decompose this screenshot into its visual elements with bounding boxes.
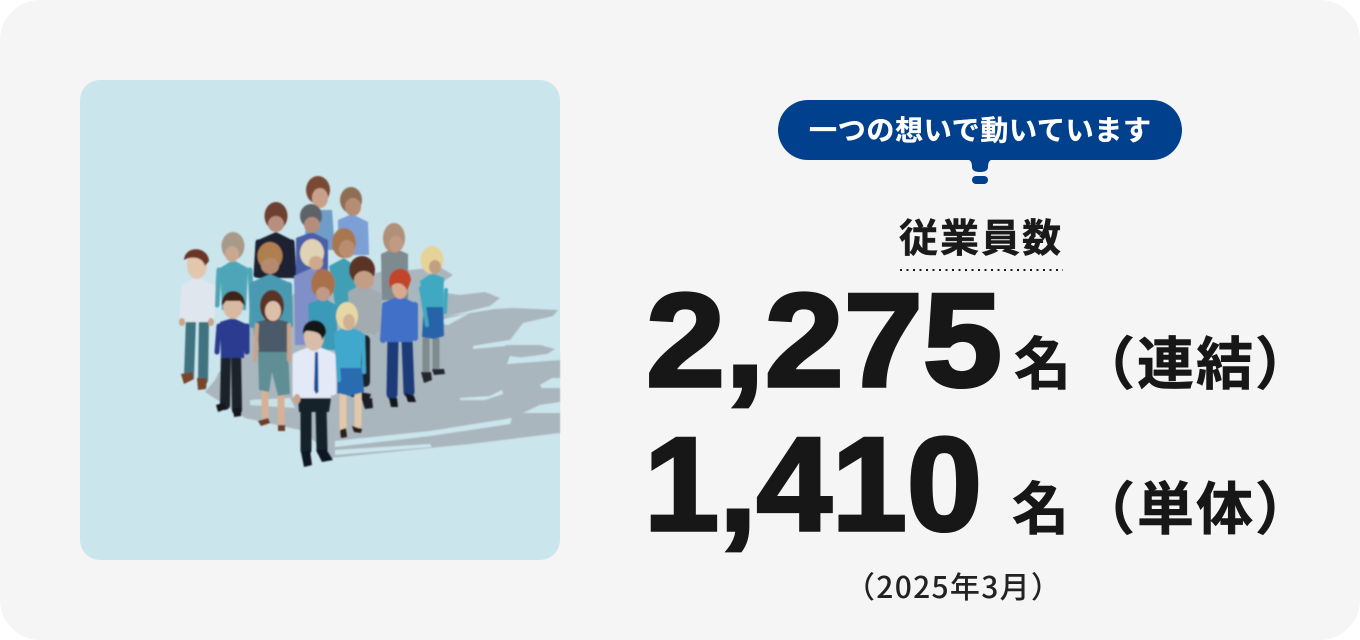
figure: man gray sweater bearded bbox=[348, 256, 379, 409]
dotted underline bbox=[900, 269, 1063, 271]
figure: blond woman teal blouse bbox=[335, 302, 364, 438]
floor shadows bbox=[205, 267, 560, 458]
figure: back short hair woman bbox=[338, 187, 369, 255]
label: consolidated suffix: （連結） bbox=[1078, 319, 1314, 401]
figure: brown hair teal woman bbox=[308, 269, 338, 350]
callout tail bbox=[969, 160, 991, 172]
number: non-consolidated employees: 1,410 bbox=[644, 411, 982, 559]
figure: cream hair lavender shirt bbox=[294, 239, 330, 345]
figure: red hair man blue shirt bbox=[383, 269, 416, 407]
date note: （2025年3月） bbox=[845, 563, 1062, 607]
figure: light brown hair woman bbox=[329, 228, 358, 310]
label: non-consolidated: 名 bbox=[1012, 464, 1069, 546]
figure: front man white shirt and tie bbox=[294, 320, 333, 467]
number: non-consolidated employees bbox=[644, 411, 1314, 559]
heading: employee count: 従業員数 bbox=[899, 208, 1061, 264]
number: consolidated employees bbox=[646, 267, 1314, 415]
figure: woman in black bbox=[256, 202, 294, 278]
figure: navy shirt woman bbox=[216, 291, 247, 417]
callout text: 一つの想いで動いています bbox=[809, 109, 1151, 149]
callout pill bbox=[778, 100, 1182, 184]
number: consolidated employees: 2,275 bbox=[646, 267, 1002, 415]
figure: back brown hair woman bbox=[304, 176, 335, 250]
label: consolidated: 名 bbox=[1014, 319, 1071, 401]
figure: blond woman right bbox=[420, 246, 446, 383]
callout dot bbox=[972, 176, 988, 184]
figure: grey blouse woman bbox=[381, 223, 408, 300]
figure: man in white shirt bbox=[179, 249, 214, 390]
label: non-consolidated suffix: （単体） bbox=[1078, 464, 1314, 546]
figure: gray hair man bbox=[296, 204, 328, 285]
figure: ash hair woman bbox=[217, 232, 252, 310]
figures bbox=[179, 176, 446, 467]
figure: woman with shorts bbox=[255, 290, 290, 431]
figure: bearded man teal bbox=[252, 242, 290, 335]
panel: crowd illustration bbox=[80, 80, 560, 560]
